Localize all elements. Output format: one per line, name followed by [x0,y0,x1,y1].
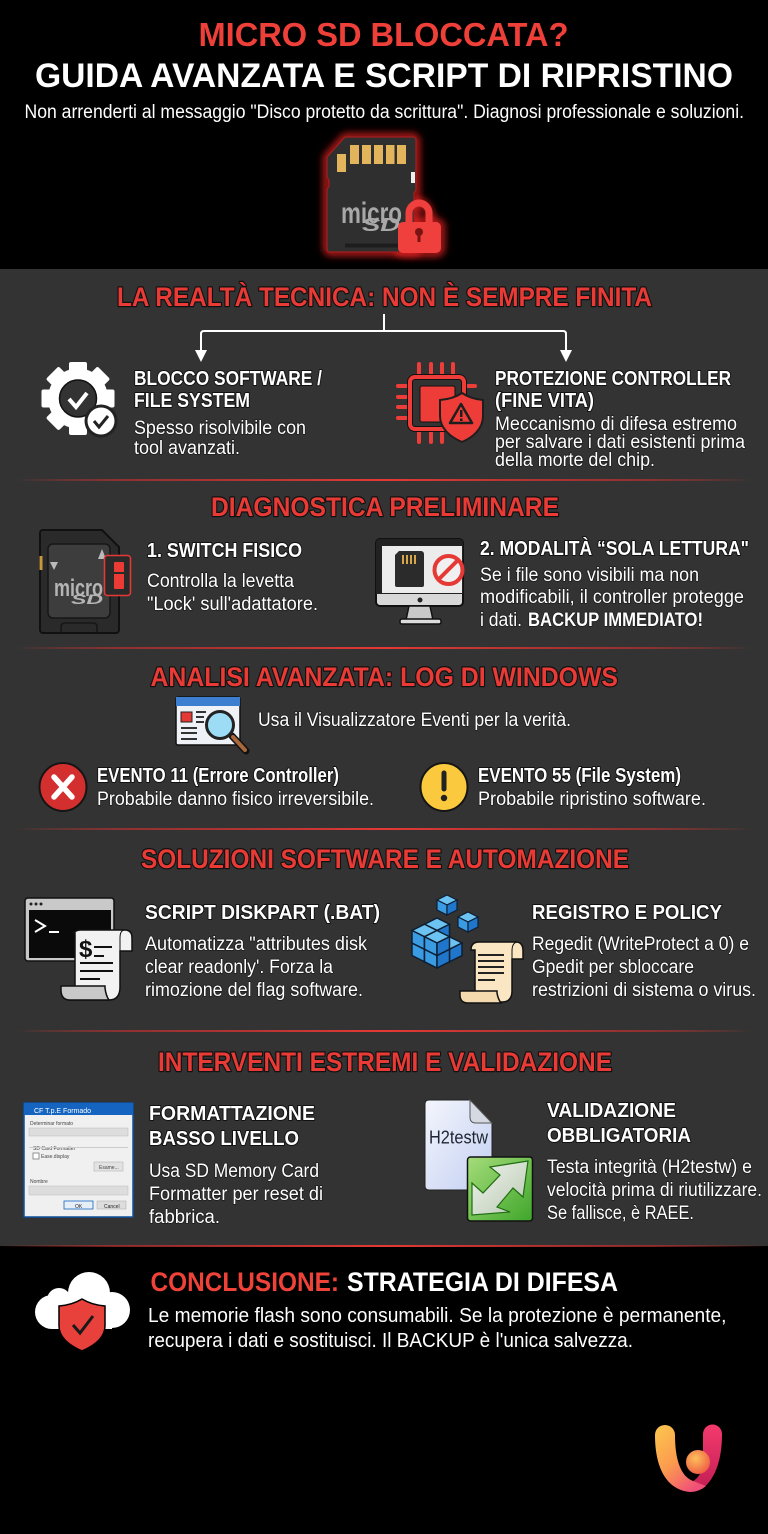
icon: SD card with lock switch: micro [54,575,103,602]
text: validazione obbligatoria: Testa integrità (H2testw) e [547,1157,752,1178]
icon: gear with checks [42,362,118,438]
icon: locked micro SD card: SD [362,215,400,235]
text: script diskpart: Automatizza "attributes disk [145,934,367,955]
text: conclusione: recupera i dati e sostituisci. Il BACKUP è l'unica salvezza. [148,1330,633,1352]
title [35,16,733,95]
heading: conclusione: CONCLUSIONE: [150,1267,339,1297]
text: switch fisico: Controlla la levetta [147,571,294,592]
text: protezione controller: Meccanismo di difesa estremo [495,414,737,435]
text: switch fisico [147,540,318,615]
text: visualizzatore eventi: Usa il Visualizzatore Eventi per la verità. [258,710,571,731]
text: modalità sola lettura: BACKUP IMMEDIATO! [528,610,703,631]
icon: SD formatter dialog: Cancel [104,1204,120,1210]
text: switch fisico: "Lock' sull'adattatore. [147,594,318,615]
text: protezione controller: (FINE VITA) [495,390,594,412]
icon: terminal and script scroll: $ [79,936,93,963]
logo [655,1424,722,1492]
text: evento 55 [478,765,706,810]
text: formattazione basso livello: Formatter per reset di [149,1184,323,1205]
text: validazione obbligatoria: OBBLIGATORIA [547,1125,691,1147]
text: evento 11: Probabile danno fisico irreversibile. [97,789,374,810]
text: formattazione basso livello: BASSO LIVELLO [149,1128,299,1150]
text: blocco software: FILE SYSTEM [134,390,250,412]
icon: SD formatter dialog: CF T.p.E Formado [34,1108,91,1115]
text: evento 11 [97,765,374,810]
text: registro e policy: Regedit (WriteProtect a 0) e [532,934,749,955]
text: blocco software: BLOCCO SOFTWARE / [134,368,322,390]
title: MICRO SD BLOCCATA? [198,16,568,53]
text: conclusione: Le memorie flash sono consumabili. Se la protezione è permanente, [148,1305,726,1327]
text: blocco software: Spesso risolvibile con [134,418,306,439]
icon: SD formatter dialog: OK [75,1204,83,1210]
text: script diskpart: rimozione del flag software. [145,980,363,1001]
text: protezione controller [495,368,745,471]
text: evento 55: Probabile ripristino software. [478,789,706,810]
text: blocco software [134,368,322,459]
text: modalità sola lettura: Se i file sono visibili ma non [480,565,699,586]
text: protezione controller: della morte del chip. [495,450,655,471]
text: evento 55: EVENTO 55 (File System) [478,765,681,787]
text: validazione obbligatoria: Se fallisce, è RAEE. [547,1203,694,1224]
icon: SD formatter dialog: Determinar formato [30,1121,73,1127]
icon: terminal and script scroll [25,898,132,1000]
text: registro e policy: restrizioni di sistema o virus. [532,980,756,1001]
text: modalità sola lettura [480,537,749,631]
icon: H2testw document and green arrows: H2testw [429,1128,489,1148]
icon: SD formatter dialog: Esame... [99,1165,119,1171]
icon: SD card with lock switch: SD [71,591,103,607]
icon: SD formatter dialog: Ease.display [41,1154,70,1160]
text: script diskpart [145,902,380,1001]
heading: conclusione: STRATEGIA DI DIFESA [347,1267,618,1297]
text: formattazione basso livello [149,1103,323,1228]
icon: cloud with shield [35,1272,130,1351]
text: validazione obbligatoria: VALIDAZIONE [547,1100,676,1122]
icon: SD formatter dialog: SD Card Formatter [33,1146,76,1152]
icon: event viewer with magnifier [176,697,246,751]
icon: locked micro SD card [327,137,441,253]
icon: H2testw document and green arrows [425,1100,532,1221]
icon: chip with warning shield [398,364,483,442]
icon: SD card with lock switch [40,530,130,633]
text: modalità sola lettura: i dati. [480,610,522,631]
text: formattazione basso livello: fabbrica. [149,1207,220,1228]
icon: yellow warning circle [420,763,468,811]
text: protezione controller: per salvare i dati esistenti prima [495,432,745,453]
text: registro e policy [532,902,756,1001]
text: script diskpart: SCRIPT DISKPART (.BAT) [145,902,380,924]
icon: locked micro SD card: micro [341,197,402,230]
icon: SD formatter dialog: Nombre [30,1179,48,1185]
arrow: split connector [195,314,572,362]
panel: main grey content [0,269,768,1246]
text: formattazione basso livello: FORMATTAZIONE [149,1103,315,1125]
heading: analisi avanzata: ANALISI AVANZATA: LOG DI WINDOWS [150,662,618,692]
text: registro e policy: Gpedit per sbloccare [532,957,694,978]
heading: conclusione [150,1267,618,1297]
icon: red error circle [40,763,86,811]
heading: la realtà tecnica: LA REALTÀ TECNICA: NON È SEMPRE FINITA [117,281,652,312]
text: registro e policy: REGISTRO E POLICY [532,902,723,924]
text: validazione obbligatoria [547,1100,762,1224]
text: blocco software: tool avanzati. [134,438,240,459]
text: protezione controller: PROTEZIONE CONTROLLER [495,368,731,390]
heading: soluzioni software: SOLUZIONI SOFTWARE E AUTOMAZIONE [141,844,629,874]
text: conclusione [148,1305,726,1352]
icon: SD formatter dialog [24,1103,133,1217]
icon: monitor with blocked card [376,539,463,624]
title: GUIDA AVANZATA E SCRIPT DI RIPRISTINO [35,57,733,95]
text: formattazione basso livello: Usa SD Memory Card [149,1161,319,1182]
text: modalità sola lettura: modificabili, il controller protegge [480,587,744,608]
heading: interventi estremi: INTERVENTI ESTREMI E VALIDAZIONE [158,1047,612,1077]
text: script diskpart: clear readonly'. Forza la [145,957,333,978]
icon: registry cubes and scroll [412,895,523,1003]
heading: diagnostica preliminare: DIAGNOSTICA PRELIMINARE [211,492,559,522]
text: switch fisico: 1. SWITCH FISICO [147,540,302,562]
text: evento 11: EVENTO 11 (Errore Controller) [97,765,339,787]
